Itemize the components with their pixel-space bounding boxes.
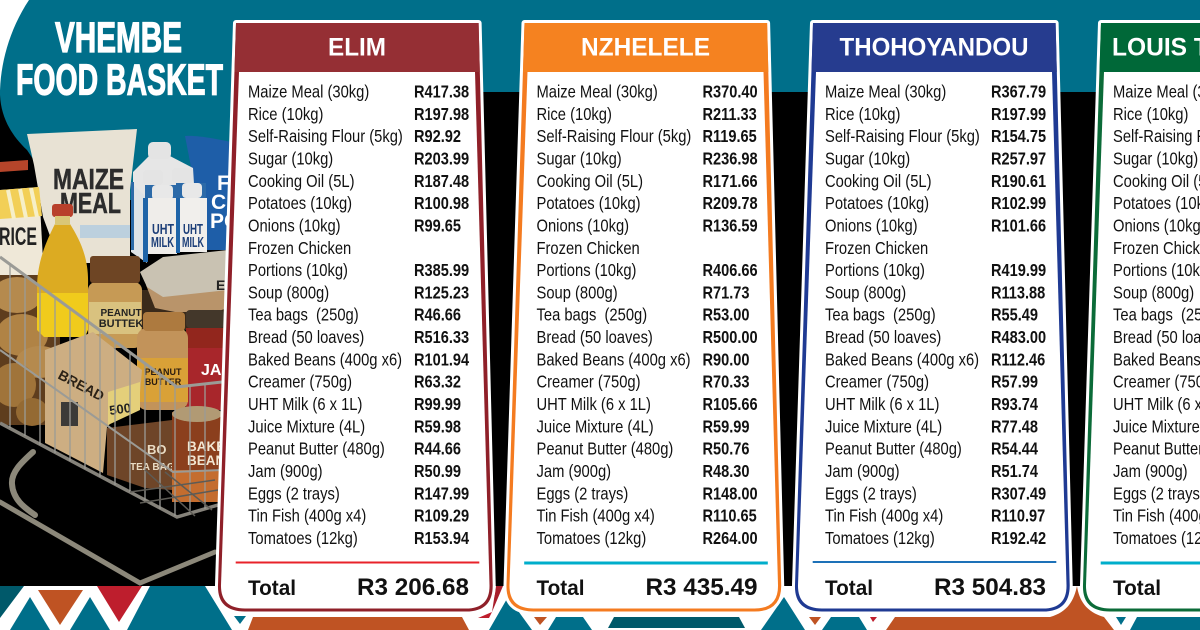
icon: tea box — [107, 420, 182, 490]
prices: R367.79 — [991, 82, 1046, 102]
item names: Self-Raising Flour (5kg) — [248, 127, 403, 147]
prices: R385.99 — [414, 261, 469, 280]
total: Nzhelele: R3 435.49 — [646, 574, 758, 601]
icon: peanut butter jar: BUTTEK — [99, 318, 143, 330]
item names — [536, 82, 691, 548]
icon: second peanut butter jar — [137, 312, 188, 410]
item names: Onions (10kg) — [536, 216, 629, 236]
prices: R92.92 — [414, 127, 461, 147]
prices: R54.44 — [991, 439, 1039, 459]
item names: Cooking Oil (5L) — [536, 171, 643, 191]
icon: UHT milk cartons: MILK — [182, 234, 204, 251]
item names: Maize Meal (30kg) — [248, 82, 369, 102]
prices: R101.66 — [991, 216, 1046, 236]
header: Louis Trichardt — [1100, 23, 1200, 72]
item names — [248, 82, 403, 548]
icon: peanut butter jar: PEANUT — [100, 308, 142, 319]
prices: R90.00 — [702, 350, 749, 370]
prices: R203.99 — [414, 149, 469, 169]
prices: R209.78 — [702, 194, 758, 213]
icon: baked beans can — [172, 406, 225, 502]
prices: R370.40 — [702, 82, 758, 102]
item names: Juice Mixture (4L) — [536, 417, 654, 437]
icon: egg tray — [135, 250, 230, 330]
panel: Louis Trichardt — [1083, 23, 1200, 612]
total: Nzhelele: Total — [536, 577, 584, 600]
header: Nzhelele — [523, 23, 768, 72]
item names: Tin Fish (400g x4) — [825, 506, 943, 526]
item names: Onions (10kg) — [248, 216, 341, 236]
icon: egg tray: E — [216, 277, 225, 293]
prices — [702, 82, 758, 548]
item names: Peanut Butter (480g) — [825, 439, 962, 459]
item names: Eggs (2 trays) — [825, 484, 917, 504]
item names: Baked Beans (400g x6) — [825, 350, 979, 370]
icon: maize meal bag — [27, 129, 137, 263]
item names: Tomatoes (12kg) — [536, 529, 646, 548]
item names: UHT Milk (6 x 1L) — [536, 395, 651, 414]
item names: Eggs (2 trays) — [536, 484, 628, 504]
icon: second peanut butter jar: BUTTER — [145, 377, 182, 387]
icon: UHT milk cartons: UHT — [152, 221, 174, 238]
prices: R57.99 — [991, 372, 1038, 392]
icon: bread bag — [45, 332, 142, 473]
prices: R59.99 — [702, 417, 749, 437]
icon: rice package — [0, 187, 43, 275]
header: Elim: ELIM — [328, 34, 386, 62]
icon: tea box: BO — [147, 442, 166, 457]
prices: R44.66 — [414, 439, 461, 459]
icon: white jug — [133, 142, 195, 200]
prices: R46.66 — [414, 305, 461, 325]
prices: R148.00 — [702, 484, 758, 504]
item names: Jam (900g) — [248, 462, 323, 481]
prices: R77.48 — [991, 417, 1038, 437]
prices: R190.61 — [991, 171, 1046, 191]
icon: cart wire basket — [0, 257, 222, 517]
total: Thohoyandou: Total — [825, 577, 873, 600]
prices: R516.33 — [414, 328, 469, 347]
item names — [1113, 82, 1200, 548]
item names: Potatoes (10kg) — [248, 194, 352, 213]
prices: R264.00 — [702, 529, 758, 548]
item names: Sugar (10kg) — [1113, 149, 1198, 169]
item names: Sugar (10kg) — [536, 149, 622, 169]
item names: Frozen Chicken — [536, 238, 640, 258]
total: Elim: R3 206.68 — [357, 574, 469, 601]
item names: Rice (10kg) — [248, 104, 323, 124]
item names: Bread (50 loaves) — [248, 328, 364, 347]
prices: R171.66 — [702, 171, 758, 191]
icon: maize meal bag: MEAL — [60, 188, 121, 220]
panel: Elim — [218, 23, 493, 612]
prices: R101.94 — [414, 350, 470, 370]
prices: R55.49 — [991, 305, 1038, 325]
icon: UHT milk cartons: MILK — [151, 234, 174, 251]
item names: Tea bags (250g) — [248, 305, 359, 325]
prices: R147.99 — [414, 484, 469, 504]
header: Thohoyandou — [812, 23, 1057, 72]
icon: maize meal bag: MAIZE — [53, 164, 124, 196]
item names: Cooking Oil (5L) — [248, 171, 354, 191]
total: Thohoyandou — [825, 574, 1046, 601]
icon: UHT milk cartons — [131, 168, 207, 263]
prices: R51.74 — [991, 462, 1039, 481]
icon: cooking oil bottle — [37, 204, 88, 337]
bottom tribal pattern — [0, 586, 1200, 630]
icon: bread bag: 500 — [108, 400, 132, 418]
panel: Thohoyandou — [795, 23, 1070, 612]
prices: R71.73 — [702, 283, 749, 303]
item names: Bread (50 loaves) — [536, 328, 653, 347]
prices: R110.97 — [991, 506, 1045, 526]
prices: R236.98 — [702, 149, 758, 169]
total: Elim — [248, 574, 469, 601]
item names: Juice Mixture (4L) — [825, 417, 942, 437]
item names: Potatoes (10kg) — [536, 194, 641, 213]
item names: Frozen Chicken — [825, 238, 928, 258]
icon: blue chicken bag: CH — [211, 191, 241, 214]
icon: blue chicken bag — [185, 136, 241, 250]
prices: R197.99 — [991, 104, 1046, 124]
total: Thohoyandou: R3 504.83 — [934, 574, 1046, 601]
prices: R257.97 — [991, 149, 1046, 169]
item names: Sugar (10kg) — [248, 149, 333, 169]
icon: bread bag: BREAD — [56, 367, 107, 404]
item names: Soup (800g) — [825, 283, 906, 303]
icon: tea box: TEA BAGS — [130, 462, 182, 473]
prices: R50.76 — [702, 439, 749, 459]
item names: Soup (800g) — [1113, 283, 1194, 303]
item names: Tea bags (250g) — [825, 305, 936, 325]
icon: jam jar: JA — [201, 362, 222, 379]
prices: R99.99 — [414, 395, 461, 414]
item names: Baked Beans (400g x6) — [248, 350, 402, 370]
icon: potatoes — [0, 275, 64, 426]
item names: Juice Mixture (4L) — [248, 417, 365, 437]
item names: UHT Milk (6 x 1L) — [248, 395, 362, 414]
prices: R500.00 — [702, 328, 758, 347]
item names: Frozen Chicken — [248, 238, 351, 258]
item names: Jam (900g) — [1113, 462, 1188, 481]
prices: R70.33 — [702, 372, 749, 392]
prices: R153.94 — [414, 529, 470, 548]
prices: R211.33 — [702, 104, 757, 124]
item names: Portions (10kg) — [248, 261, 348, 280]
prices: R100.98 — [414, 194, 469, 213]
item names: Portions (10kg) — [536, 261, 636, 280]
item names: Cooking Oil (5L) — [825, 171, 931, 191]
item names: Rice (10kg) — [536, 104, 612, 124]
item names: Portions (10kg) — [825, 261, 925, 280]
prices — [414, 82, 470, 548]
item names: Tin Fish (400g x4) — [536, 506, 655, 526]
panel: Nzhelele — [506, 23, 781, 612]
item names: Rice (10kg) — [825, 104, 900, 124]
total: Louis Trichardt: Total — [1113, 577, 1161, 600]
item names: UHT Milk (6 x 1L) — [825, 395, 939, 414]
item names: Peanut Butter (480g) — [248, 439, 385, 459]
item names — [825, 82, 980, 548]
item names: Creamer (750g) — [248, 372, 352, 392]
prices: R154.75 — [991, 127, 1046, 147]
prices: R59.98 — [414, 417, 461, 437]
teal header background — [0, 0, 1200, 200]
prices: R192.42 — [991, 529, 1046, 548]
icon: second peanut butter jar: PEANUT — [144, 367, 182, 377]
icon: jam jar — [186, 310, 224, 410]
item names: Creamer (750g) — [825, 372, 929, 392]
item names: Sugar (10kg) — [825, 149, 910, 169]
prices: R48.30 — [702, 462, 749, 481]
icon: UHT milk cartons: UHT — [183, 221, 203, 238]
prices: R112.46 — [991, 350, 1045, 370]
item names: Tin Fish (400g x4) — [248, 506, 366, 526]
item names: Soup (800g) — [536, 283, 618, 303]
item names: Potatoes (10kg) — [825, 194, 929, 213]
item names: Peanut Butter (480g) — [536, 439, 673, 459]
item names: Self-Raising Flour (5kg) — [536, 127, 691, 147]
total: Elim: Total — [248, 577, 296, 600]
icon: rice package: RICE — [0, 223, 37, 251]
prices: R99.65 — [414, 216, 461, 236]
prices: R110.65 — [702, 506, 757, 526]
item names: Jam (900g) — [825, 462, 900, 481]
prices: R483.00 — [991, 328, 1046, 347]
prices: R136.59 — [702, 216, 758, 236]
title: VHEMBE — [55, 14, 182, 62]
item names: Eggs (2 trays) — [248, 484, 340, 504]
icon: blue chicken bag: PO — [210, 210, 240, 233]
header: Nzhelele: NZHELELE — [581, 34, 710, 62]
prices: R119.65 — [702, 127, 757, 147]
header: Thohoyandou: THOHOYANDOU — [840, 34, 1028, 62]
prices: R197.98 — [414, 104, 469, 124]
item names: Creamer (750g) — [536, 372, 641, 392]
item names: Tomatoes (12kg) — [825, 529, 935, 548]
icon: cart handle — [0, 160, 28, 172]
prices: R105.66 — [702, 395, 758, 414]
prices: R63.32 — [414, 372, 461, 392]
illustration: shopping cart with groceries — [0, 129, 241, 583]
prices: R187.48 — [414, 171, 469, 191]
prices: R419.99 — [991, 261, 1046, 280]
item names: Baked Beans (400g x6) — [536, 350, 691, 370]
item names: Bread (50 loaves) — [825, 328, 941, 347]
header: Elim — [234, 23, 480, 72]
item names: Rice (10kg) — [1113, 104, 1188, 124]
prices: R406.66 — [702, 261, 758, 280]
prices: R102.99 — [991, 194, 1046, 213]
icon: cart frame — [0, 452, 215, 583]
prices: R109.29 — [414, 506, 469, 526]
prices: R125.23 — [414, 283, 469, 303]
item names: Jam (900g) — [536, 462, 611, 481]
icon: baked beans can: BEAN — [187, 453, 225, 468]
total: Nzhelele — [536, 574, 758, 601]
prices: R417.38 — [414, 82, 469, 102]
item names: Tomatoes (12kg) — [248, 529, 358, 548]
title — [16, 14, 223, 104]
item names: Maize Meal (30kg) — [536, 82, 658, 102]
item names: Maize Meal (30kg) — [825, 82, 946, 102]
icon: peanut butter jar — [88, 256, 143, 348]
icon: baked beans can: BAKE — [187, 439, 225, 454]
item names: Tea bags (250g) — [536, 305, 647, 325]
item names: Self-Raising Flour (5kg) — [825, 127, 980, 147]
prices: R50.99 — [414, 462, 461, 481]
item names: Onions (10kg) — [825, 216, 918, 236]
item names: Soup (800g) — [248, 283, 329, 303]
prices — [991, 82, 1046, 548]
prices: R113.88 — [991, 283, 1045, 303]
title: FOOD BASKET — [16, 56, 223, 104]
icon: blue chicken bag: F — [217, 172, 230, 195]
prices: R93.74 — [991, 395, 1039, 414]
prices: R53.00 — [702, 305, 749, 325]
prices: R307.49 — [991, 484, 1046, 504]
